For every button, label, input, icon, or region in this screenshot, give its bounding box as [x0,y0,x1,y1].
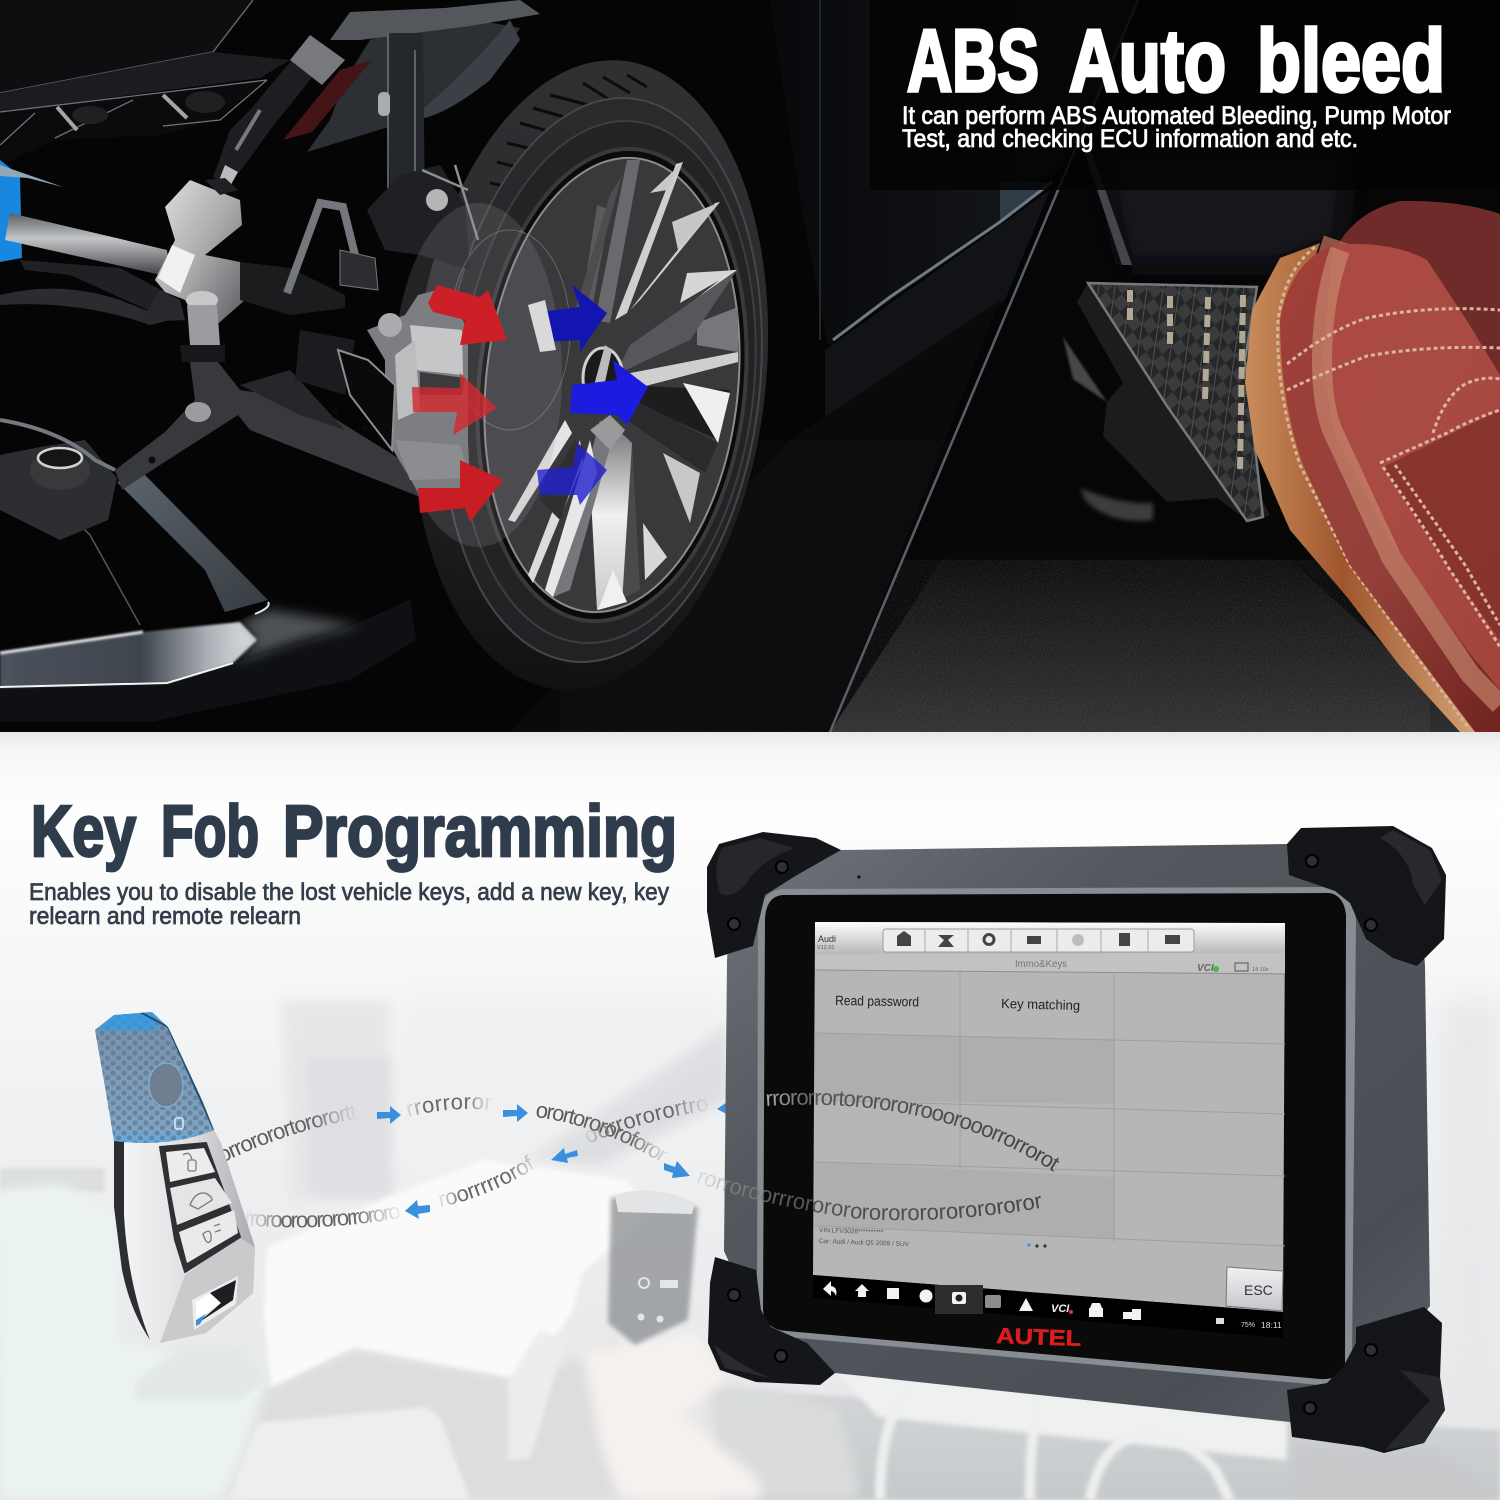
binary data stream: oorrororortro [586,1100,708,1142]
menu grid lines [815,973,1285,1246]
title: ABS Auto bleed: ABS [907,11,1039,110]
bushing and subframe [115,291,430,497]
faded hand [264,1160,650,1387]
rubber bumper top-right [1287,826,1446,966]
title: ABS Auto bleed [907,11,1445,110]
rubber bumper bottom-right [1287,1307,1445,1453]
faded lower reflection right [720,1390,1500,1500]
tablet black bezel [763,893,1346,1379]
top photo panel: ABS bleeding [0,0,1500,732]
menu item: Key matching: Key matching [1001,996,1080,1013]
tablet inner frame [757,887,1356,1386]
diagnostic tablet [707,826,1446,1453]
rubber bumper bottom-left [708,1257,835,1385]
small lock glyph [175,1118,183,1129]
status clock: 75% [1241,1322,1255,1329]
title: ABS Auto bleed: Auto [1069,11,1226,110]
rim dish [483,156,741,614]
shoe stitching [1287,309,1500,647]
android nav bar: VCI [1051,1303,1070,1315]
front camera dot [857,875,861,879]
translucent fender [283,0,540,152]
android nav bar [813,1275,1283,1338]
screen toolbar [815,922,1285,954]
faded left console strip [0,1168,105,1192]
upper knuckle [340,165,478,290]
binary data stream: orrororortororortt [223,1105,357,1161]
diagonal scene divider [830,0,1138,732]
screen brand label: Audi [818,934,836,944]
wheel spokes [508,160,738,610]
strut [378,33,424,188]
dark shoe detail [1383,410,1500,640]
title: ABS Auto bleed: bleed [1257,11,1445,110]
rubber bumper top-left [707,832,841,958]
faded lever [508,1330,566,1460]
heading: Key Fob Programming: Programming [283,792,677,872]
screen [813,922,1285,1338]
reflection: steering wheel [880,1385,1230,1500]
binary data stream: orortorororoforor [536,1106,668,1161]
heading: Key Fob Programming: Key [31,792,136,872]
AUTEL logo: AUTEL [996,1323,1082,1351]
brake caliper and disc [338,203,570,547]
faded sleeve [0,1183,266,1500]
steering shaft [213,35,345,190]
VCI status: VCI [1197,963,1214,974]
fob reflection [136,1343,267,1400]
carpet floor [832,578,1460,732]
vehicle info [819,1227,910,1248]
shaded menu cells [815,1033,1114,1104]
vehicle info: VIN:LFV3028********** [819,1227,884,1236]
grey under hand [230,1340,640,1500]
VCI status [1197,963,1269,974]
tyre [418,60,768,688]
wheel and tyre [418,60,768,688]
second welt over shoe [1322,250,1500,705]
triangular loop [287,203,357,293]
hood and headlight [0,0,290,146]
vehicle info: Car: Audi / Audi Q5 2009 / SUV [819,1238,910,1248]
shoe upper [1280,244,1500,732]
bottom panel background: faded car interior [0,732,1500,1500]
menu item: Read password: Read password [835,993,919,1009]
binary data stream: rrorroror [406,1097,492,1116]
pedal shadow flare [1063,337,1107,402]
front shoe sole [1245,243,1490,732]
faded windscreen streak [526,1020,728,1167]
rear ghost shoe [1318,200,1500,375]
bright strip below tablet [838,1373,1287,1460]
stream overlay across tablet: rrororrortororororrooorooorrorrorot [766,1092,1060,1172]
fob dark side edge [114,1141,150,1340]
binary data stream: rrorooroorororrororo [246,1207,400,1228]
reflection: right bumper [1290,1447,1500,1500]
stream overlay across tablet [698,1092,1060,1220]
blue-grey strap [117,475,268,612]
upper footwell wall [1109,190,1346,265]
screen: V12.01 [817,945,834,951]
fob lower facet [160,1238,255,1343]
description: key fob: Enables you to disable the lost vehicle keys, add a new key, key [29,879,669,906]
description: key fob [29,879,669,930]
screen status row [815,953,1285,973]
light console block [228,1407,470,1500]
button glyphs [183,1153,221,1242]
tablet metal body [724,844,1430,1422]
description: key fob: relearn and remote relearn [29,903,301,930]
tread lines [490,75,647,192]
pedal mount ring [1080,488,1153,521]
tyre sidewall [450,97,763,663]
key ring slot [192,1276,238,1330]
button: unlock [166,1148,215,1182]
lower bumper with highlight [0,530,416,722]
faded fingers [582,1333,760,1500]
pedal body [1077,283,1270,522]
fob button frame [160,1143,240,1272]
description: ABS: Test, and checking ECU information and etc. [902,125,1358,153]
blue pressure arrows [528,285,648,505]
description: ABS [902,102,1451,153]
pagination dots [1027,1243,1047,1248]
heading: Key Fob Programming: Fob [161,792,259,872]
dark title backing [870,0,1500,190]
heading: Key Fob Programming [31,792,677,872]
blue data arrows [377,1100,742,1219]
steering rack tube [0,160,180,325]
pedal arm [1083,147,1132,265]
button: lights [179,1210,238,1263]
key fob [90,1005,255,1343]
door panel and sill [560,0,1053,732]
faded windscreen pillar [282,1000,391,1200]
sole welt [1278,247,1470,730]
red pressure arrows [412,285,507,522]
fob silver body [114,1130,255,1343]
button: trunk [170,1178,232,1225]
fob blue scanned top [90,1005,220,1150]
rack housing [140,178,245,335]
android nav bar: 18:11 [1261,1320,1282,1330]
ESC button [1226,1267,1283,1311]
binary data stream: roorrrrrorof [439,1154,534,1206]
rubber boot [240,262,345,315]
faded right side [1440,1000,1500,1400]
footwell scene with brake pedal [832,147,1500,732]
lower arm mount [0,420,117,540]
ESC button: ESC [1244,1282,1273,1298]
lit overlap dome [1322,244,1500,690]
description: ABS: It can perform ABS Automated Bleeding, Pump Motor [902,102,1451,130]
brake pedal [1088,283,1263,521]
stream overlay across tablet: rorroroorrrororororororororororororor [698,1172,1041,1220]
VCI status: 14.10v [1252,967,1269,973]
screen page title: Immo&Keys [1015,959,1067,970]
toolbar buttons [883,929,1194,952]
binary data stream [223,1097,708,1228]
car side scene [0,0,1138,732]
reflection: left bumper [708,1385,860,1500]
wheel hub [583,345,625,450]
faded key fob in hand [608,1190,698,1345]
